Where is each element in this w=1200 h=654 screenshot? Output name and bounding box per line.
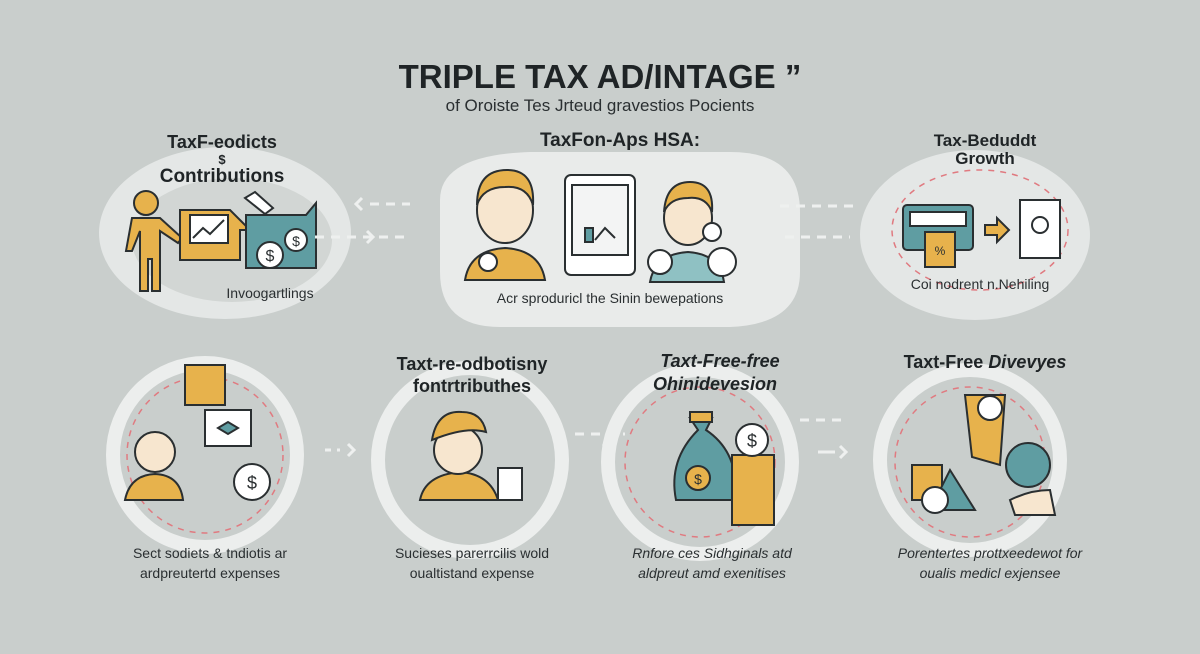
caption: bottom 3: Rnfore ces Sidhginals atd [632, 545, 793, 561]
heading: HSA: TaxFon-Aps HSA: [540, 130, 700, 151]
icon: person [126, 191, 182, 291]
heading: bottom 2: Taxt-re-odbotisny [397, 354, 547, 374]
icon: tablet [565, 175, 635, 275]
heading: bottom 2: fontrtributhes [413, 376, 531, 396]
arrow: dashed right top [780, 206, 855, 237]
title: TRIPLE TAX AD/INTAGE ” [399, 58, 801, 95]
caption: bottom 4 [898, 545, 1084, 581]
icon: money bag and coins [674, 412, 774, 525]
caption: bottom 1: Sect sodiets & tndiotis ar [133, 545, 287, 561]
heading: bottom 2 [397, 354, 547, 396]
subtitle: of Oroiste Tes Jrteud gravestios Pocients [446, 96, 754, 115]
arrow: bottom 1 [325, 444, 354, 456]
heading: contributions: $ [218, 152, 226, 167]
panel: HSA [440, 130, 800, 327]
heading: bottom 3: Ohinidevesion [653, 374, 777, 394]
caption: bottom 1 [133, 545, 287, 581]
panel: contributions [99, 132, 351, 319]
heading: bottom 3 [653, 351, 780, 394]
caption: bottom 4: oualis medicl exjensee [920, 565, 1061, 581]
icon: girl with receipt [420, 412, 522, 500]
caption: contributions: Invoogartlings [226, 285, 314, 301]
arrow: bottom 3 [800, 420, 846, 458]
icon: money bag [245, 192, 316, 268]
panel: bottom 4 [880, 352, 1084, 581]
icon: money bag: $ [266, 248, 275, 265]
caption: growth: Coi nodrent n.Nehiling [911, 276, 1049, 292]
icon: woman with document: $ [247, 473, 257, 493]
caption: bottom 3: aldpreut amd exenitises [638, 565, 786, 581]
icon: money bag: $ [292, 233, 300, 249]
icon: card and document: % [935, 244, 946, 258]
heading: bottom 3: Taxt-Free-free [660, 351, 780, 371]
heading: contributions: TaxF-eodicts [167, 132, 277, 152]
caption: bottom 3 [632, 545, 793, 581]
caption: bottom 4: Porentertes prottxeedewot for [898, 545, 1084, 561]
caption: HSA: Acr sproduricl the Sinin bewepations [497, 290, 723, 306]
caption: bottom 2: oualtistand expense [410, 565, 534, 581]
heading: growth: Growth [955, 149, 1015, 168]
panel: bottom 2 [378, 354, 562, 581]
heading: bottom 4: Taxt-Free Divevyes [904, 352, 1066, 372]
icon: chart box [180, 210, 250, 260]
heading: contributions: Contributions [160, 166, 284, 187]
caption: bottom 1: ardpreutertd expenses [140, 565, 280, 581]
icon: man [465, 170, 545, 280]
heading: growth: Tax-Beduddt [934, 131, 1037, 150]
panel: bottom 3 [608, 351, 793, 581]
icon: money bag and coins: $ [694, 471, 702, 487]
panel: growth [860, 131, 1090, 320]
icon: card and document [903, 200, 1060, 267]
caption: bottom 2: Sucieses parerrcilis wold [395, 545, 549, 561]
icon: money bag and coins: $ [747, 431, 757, 451]
heading: contributions [160, 132, 284, 187]
arrow: bottom 2 [575, 434, 625, 456]
arrow: dashed left [356, 198, 410, 210]
caption: bottom 2 [395, 545, 549, 581]
panel: bottom 1 [113, 363, 297, 581]
icon: bills and hands [912, 395, 1055, 515]
heading: growth [934, 131, 1037, 168]
arrow: dashed right [315, 231, 410, 243]
icon: girl [648, 182, 736, 282]
icon: woman with document [125, 365, 270, 500]
